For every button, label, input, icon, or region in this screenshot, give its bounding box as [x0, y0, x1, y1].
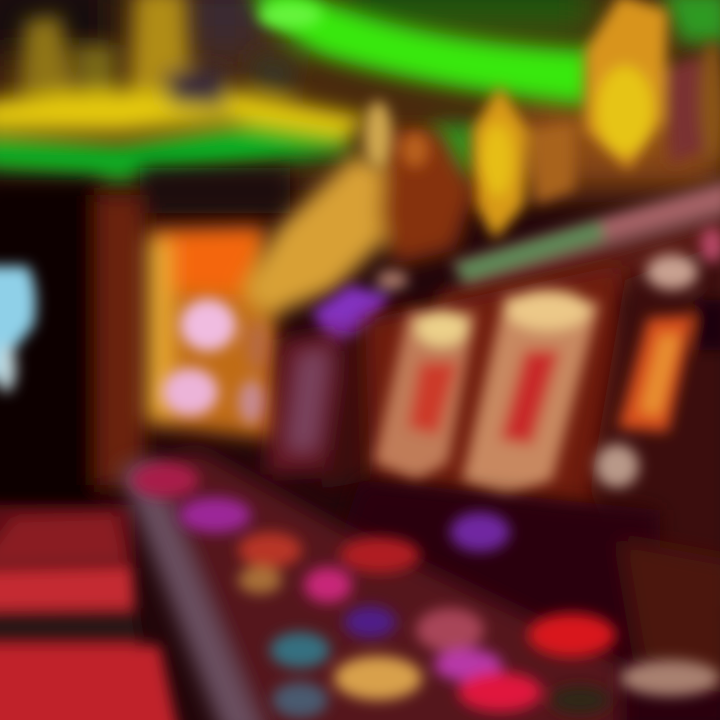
top rail across machines: [430, 178, 720, 340]
slot machine reel panels: [365, 265, 655, 515]
side machine with orange display: [590, 227, 720, 640]
ceiling: green and gold signage: [0, 0, 720, 240]
dark machine dividers: [265, 300, 405, 490]
red carpet: [0, 505, 180, 720]
lower cabinet: [340, 480, 720, 720]
golden figure and purple accent: [240, 101, 475, 345]
orange screen machine: [145, 225, 285, 440]
reel panel: right: [462, 290, 600, 498]
left wall with blue screen: [0, 168, 290, 515]
console with colourful buttons: [120, 450, 720, 720]
reel panel: left: [374, 310, 476, 482]
